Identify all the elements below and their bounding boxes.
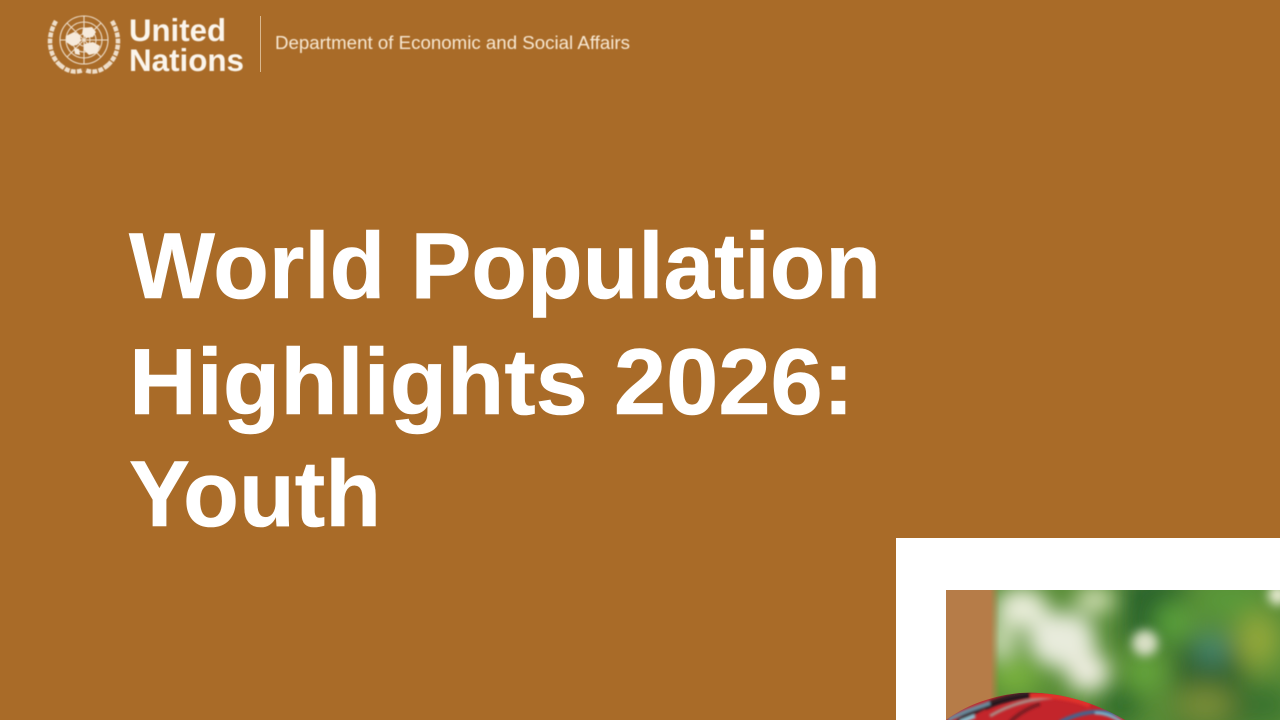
header: UN logo and department [50, 12, 630, 78]
title: World Population [129, 213, 881, 318]
plaid headwrap [946, 692, 1125, 720]
title [129, 213, 881, 546]
blurred foliage [994, 590, 1280, 720]
white photo frame [896, 538, 1280, 720]
department name: Department of Economic and Social Affairs [275, 32, 630, 53]
logo wordmark: United Nations: United [129, 12, 226, 48]
photo: youth in plaid headwrap against green foliage [946, 590, 1280, 720]
logo wordmark: United Nations: Nations [129, 42, 244, 78]
logo wordmark: United Nations [129, 12, 244, 78]
header divider [260, 16, 261, 72]
title: Youth [129, 441, 381, 546]
brown post at left [946, 590, 1000, 720]
icon: UN emblem [50, 16, 118, 72]
title: Highlights 2026: [129, 329, 854, 434]
